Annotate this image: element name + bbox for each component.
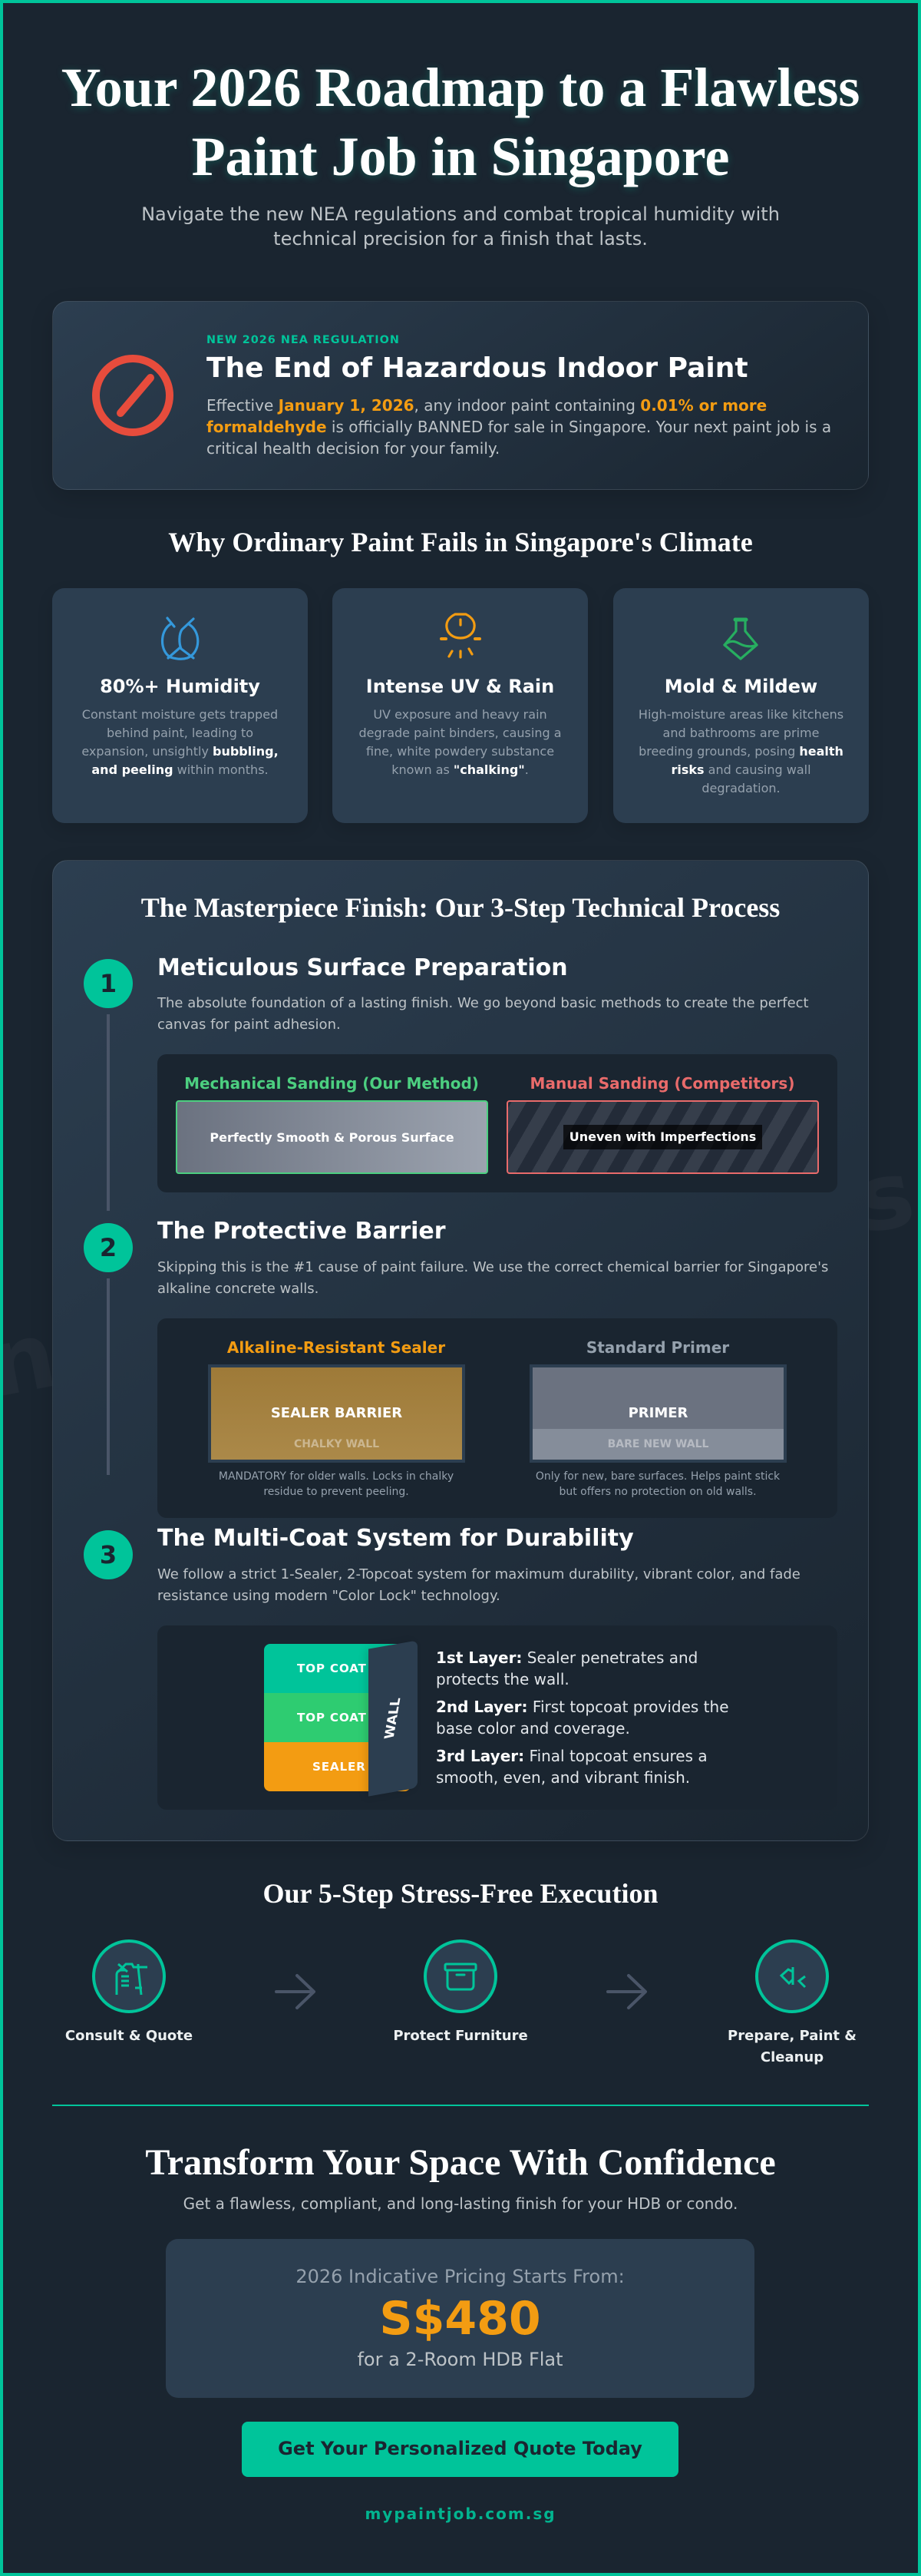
card text: Constant moisture gets trapped [82, 707, 278, 722]
step 2 description: alkaline concrete walls. [157, 1281, 319, 1297]
card text: breeding grounds, posing health [639, 744, 843, 759]
layer: sealer: SEALER [312, 1760, 366, 1774]
label: manual sanding: Manual Sanding (Competitors) [530, 1074, 794, 1093]
caption: primer [536, 1470, 780, 1498]
card text [639, 707, 843, 795]
step 1 number: 1 [100, 969, 117, 998]
step label: Protect Furniture [393, 2028, 528, 2044]
alert body text: Effective January 1, 2026, any indoor paint containing 0.01% or more [206, 396, 767, 415]
step 3 description [157, 1566, 801, 1604]
card text: UV exposure and heavy rain [373, 707, 547, 722]
icon: prepare [755, 1939, 829, 2013]
panel: 3-step process [52, 860, 869, 1841]
step 1 description: canvas for paint adhesion. [157, 1017, 341, 1033]
heading: execution: Our 5-Step Stress-Free Execution [263, 1878, 658, 1909]
step 1 number [84, 959, 133, 1008]
pricing label: 2026 Indicative Pricing Starts From: [295, 2266, 625, 2287]
layer: sealer [264, 1742, 411, 1791]
subtitle [141, 203, 780, 250]
layer explanation text: base color and coverage. [436, 1719, 630, 1738]
card title: Intense UV & Rain [366, 676, 554, 697]
layer: top coat two: TOP COAT [297, 1711, 367, 1724]
layer: top coat two [264, 1693, 411, 1742]
step 3 number [84, 1530, 133, 1579]
decorative watermark fragments: s [848, 1139, 921, 1255]
step 1 title: Meticulous Surface Preparation [157, 954, 568, 981]
card text [358, 707, 562, 777]
step 2 number: 2 [100, 1233, 117, 1262]
step label: Cleanup [761, 2049, 824, 2065]
step 3 description: We follow a strict 1-Sealer, 2-Topcoat system for maximum durability, vibrant color, and fade [157, 1566, 801, 1582]
eyebrow label: NEW 2026 NEA REGULATION [206, 334, 400, 346]
icon: humidity [161, 617, 200, 660]
step label: Consult & Quote [65, 2028, 193, 2044]
alert body text: formaldehyde is officially BANNED for sale in Singapore. Your next paint job is a [206, 418, 831, 436]
swatch: smooth surface: Perfectly Smooth & Porous Surface [210, 1130, 454, 1144]
diagram: wall [368, 1640, 418, 1797]
step: protect furniture [393, 1939, 528, 2044]
title: Your 2026 Roadmap to a Flawless [61, 57, 860, 118]
label: uneven: Uneven with Imperfections [569, 1129, 756, 1144]
step 3 number: 3 [100, 1540, 117, 1569]
caption: primer: Only for new, bare surfaces. Helps paint stick [536, 1470, 780, 1483]
card text: behind paint, leading to [107, 726, 253, 740]
layer explanation text: 2nd Layer: First topcoat provides the [436, 1698, 729, 1716]
card text: known as "chalking". [391, 762, 529, 777]
wall label: WALL [382, 1698, 404, 1739]
heading: process panel: The Masterpiece Finish: Our 3-Step Technical Process [141, 892, 780, 923]
panel: multi-coat diagram [157, 1625, 837, 1810]
swatch: uneven surface [507, 1100, 819, 1174]
panel: sanding comparison [157, 1054, 837, 1192]
step 1 description: The absolute foundation of a lasting finish. We go beyond basic methods to create the perfect [157, 995, 809, 1011]
card text: and peeling within months. [91, 762, 269, 777]
card text: expansion, unsightly bubbling, [81, 744, 279, 759]
pricing note: for a 2-Room HDB Flat [357, 2349, 563, 2370]
title [61, 57, 861, 191]
label: mechanical sanding: Mechanical Sanding (Our Method) [184, 1074, 479, 1093]
primer label: PRIMER [629, 1405, 688, 1421]
card text: risks and causing wall [671, 762, 811, 777]
step: prepare, paint and cleanup [728, 1939, 857, 2065]
step label [728, 2028, 857, 2065]
price: S$480 [379, 2292, 541, 2346]
button: quote: Get Your Personalized Quote Today [278, 2438, 642, 2459]
card title: Mold & Mildew [665, 676, 817, 697]
step 2 title: The Protective Barrier [157, 1218, 446, 1245]
icon: box [424, 1939, 497, 2013]
title: Paint Job in Singapore [192, 126, 729, 187]
alert body text [206, 396, 831, 458]
label: sealer: Alkaline-Resistant Sealer [227, 1338, 445, 1357]
call to action subtitle: Get a flawless, compliant, and long-lasting finish for your HDB or condo. [183, 2194, 738, 2213]
step 3 description: resistance using modern "Color Lock" technology. [157, 1588, 500, 1604]
subtitle: Navigate the new NEA regulations and combat tropical humidity with [141, 203, 780, 225]
card text: High-moisture areas like kitchens [639, 707, 843, 722]
bare wall label: BARE NEW WALL [608, 1438, 708, 1450]
layer explanation text: protects the wall. [436, 1670, 569, 1688]
label: primer: Standard Primer [586, 1338, 729, 1357]
diagram: primer over wall [530, 1364, 787, 1463]
panel: UV and rain card [332, 588, 588, 823]
step label: Prepare, Paint & [728, 2028, 857, 2044]
step 2 description [157, 1259, 828, 1297]
panel: pricing [166, 2239, 754, 2398]
layer explanation text [436, 1648, 729, 1787]
step 1 description [157, 995, 809, 1033]
alert body text: critical health decision for your family. [206, 439, 500, 458]
caption: sealer: residue to prevent peeling. [263, 1486, 409, 1498]
arrow [606, 1973, 647, 2009]
step 3 title: The Multi-Coat System for Durability [157, 1525, 634, 1552]
card text [81, 707, 279, 777]
label: uneven [563, 1125, 762, 1149]
heading: call to action: Transform Your Space With Confidence [145, 2142, 776, 2183]
step 2 description: Skipping this is the #1 cause of paint failure. We use the correct chemical barrier for Singapore's [157, 1259, 828, 1275]
layer explanation text: smooth, even, and vibrant finish. [436, 1768, 690, 1787]
layer: top coat: TOP COAT [297, 1662, 367, 1675]
button: quote [242, 2422, 678, 2477]
diagram: paint layers [264, 1644, 409, 1791]
icon: consult [92, 1939, 166, 2013]
card text: fine, white powdery substance [366, 744, 554, 759]
panel: mold card [613, 588, 869, 823]
icon: flask [723, 617, 758, 660]
swatch: smooth surface [176, 1100, 488, 1174]
card title: 80%+ Humidity [100, 676, 260, 697]
panel: humidity card [52, 588, 308, 823]
card text: degradation. [701, 781, 781, 795]
chalky wall label: CHALKY WALL [294, 1438, 379, 1450]
card text: and bathrooms are prime [663, 726, 819, 740]
sealer label: SEALER BARRIER [271, 1405, 402, 1421]
caption: primer: but offers no protection on old walls. [559, 1486, 757, 1498]
alert heading: The End of Hazardous Indoor Paint [206, 352, 748, 384]
step: consult and quote [65, 1939, 193, 2044]
layer explanation text: 1st Layer: Sealer penetrates and [436, 1648, 698, 1667]
panel: primer comparison [157, 1318, 837, 1518]
website url: mypaintjob.com.sg [365, 2505, 556, 2523]
icon: sun and rain [440, 613, 481, 659]
step 2 number [84, 1223, 133, 1272]
caption: sealer: MANDATORY for older walls. Locks in chalky [219, 1470, 454, 1483]
icon: prohibited sign [92, 355, 173, 436]
heading: climate section: Why Ordinary Paint Fails in Singapore's Climate [168, 527, 753, 557]
caption: sealer [219, 1470, 454, 1498]
arrow [275, 1973, 315, 2009]
layer: top coat [264, 1644, 411, 1693]
panel: regulation alert [52, 301, 869, 490]
layer explanation text: 3rd Layer: Final topcoat ensures a [436, 1747, 708, 1765]
diagram: sealer over wall [208, 1364, 465, 1463]
card text: degrade paint binders, causing a [358, 726, 562, 740]
subtitle: technical precision for a finish that lasts. [273, 228, 648, 250]
